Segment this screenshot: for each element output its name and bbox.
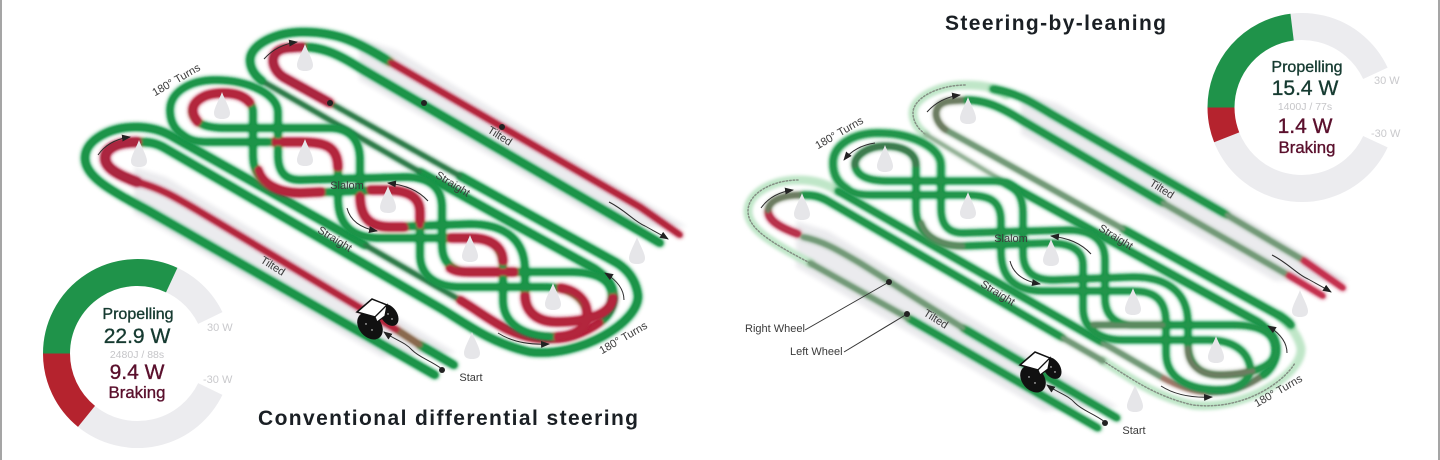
title: leaning: Steering-by-leaning <box>945 12 1166 35</box>
track labels <box>813 115 1305 437</box>
cones <box>794 97 1308 412</box>
direction arrows <box>761 95 1331 422</box>
track labels: Slalom <box>330 180 364 192</box>
gauge: conventional power: 22.9 W <box>104 325 170 348</box>
gauge: leaning power: 1.4 W <box>1278 115 1333 138</box>
gauge: conventional power: Braking <box>109 383 165 402</box>
tilted ramps <box>134 38 687 357</box>
track labels: Tilted <box>1147 177 1176 202</box>
gauge: leaning power: Braking <box>1279 138 1335 157</box>
track labels: 180° Turns <box>597 320 650 357</box>
wheel callouts: Right Wheel <box>745 323 805 335</box>
wheel callouts <box>745 279 1108 426</box>
cones <box>131 44 645 359</box>
gauge: conventional power: 30 W <box>207 322 233 334</box>
track labels: Tilted <box>921 307 950 332</box>
track labels: Straight <box>978 278 1017 309</box>
track labels: Slalom <box>994 233 1028 245</box>
tracks: wheel paths <box>768 89 1343 428</box>
tracks: wheel paths <box>85 32 680 375</box>
track labels: Straight <box>1096 222 1135 253</box>
gauge: conventional power: 2480J / 88s <box>110 349 164 361</box>
wheel callouts: Left Wheel <box>790 346 843 358</box>
robot <box>1015 352 1065 398</box>
panel: steering-by-leaning <box>745 12 1401 437</box>
track labels <box>150 62 650 384</box>
track labels: Straight <box>315 224 354 255</box>
gauge: leaning power: 1400J / 77s <box>1278 101 1332 113</box>
gauge: conventional power: -30 W <box>203 374 233 386</box>
outer turn halos and dotted thin tracks <box>748 85 1301 406</box>
slalom braid <box>170 80 613 337</box>
gauge: conventional power <box>56 273 233 434</box>
gauge: leaning power <box>1221 26 1401 188</box>
gauge: conventional power: 9.4 W <box>110 361 165 384</box>
gauge: leaning power: 30 W <box>1374 75 1400 87</box>
track labels: Start <box>1122 425 1146 437</box>
panel: conventional differential steering <box>56 32 687 434</box>
gauge: leaning power: -30 W <box>1371 128 1401 140</box>
gauge: leaning power: 15.4 W <box>1272 77 1338 100</box>
track labels: Start <box>459 372 483 384</box>
robot <box>352 299 402 345</box>
direction arrows <box>98 42 668 369</box>
track markers <box>327 100 505 373</box>
track labels: Straight <box>433 169 472 200</box>
title: conventional: Conventional differential steering <box>258 407 638 430</box>
track labels: Tilted <box>258 254 287 279</box>
track labels: 180° Turns <box>150 62 203 99</box>
track labels: 180° Turns <box>1252 373 1305 410</box>
tilted ramps <box>796 92 1349 411</box>
track labels: 180° Turns <box>813 115 866 152</box>
slalom braid <box>833 133 1276 390</box>
gauge: leaning power: Propelling <box>1271 59 1343 76</box>
track labels: Tilted <box>485 124 514 149</box>
gauge: conventional power: Propelling <box>102 306 174 323</box>
